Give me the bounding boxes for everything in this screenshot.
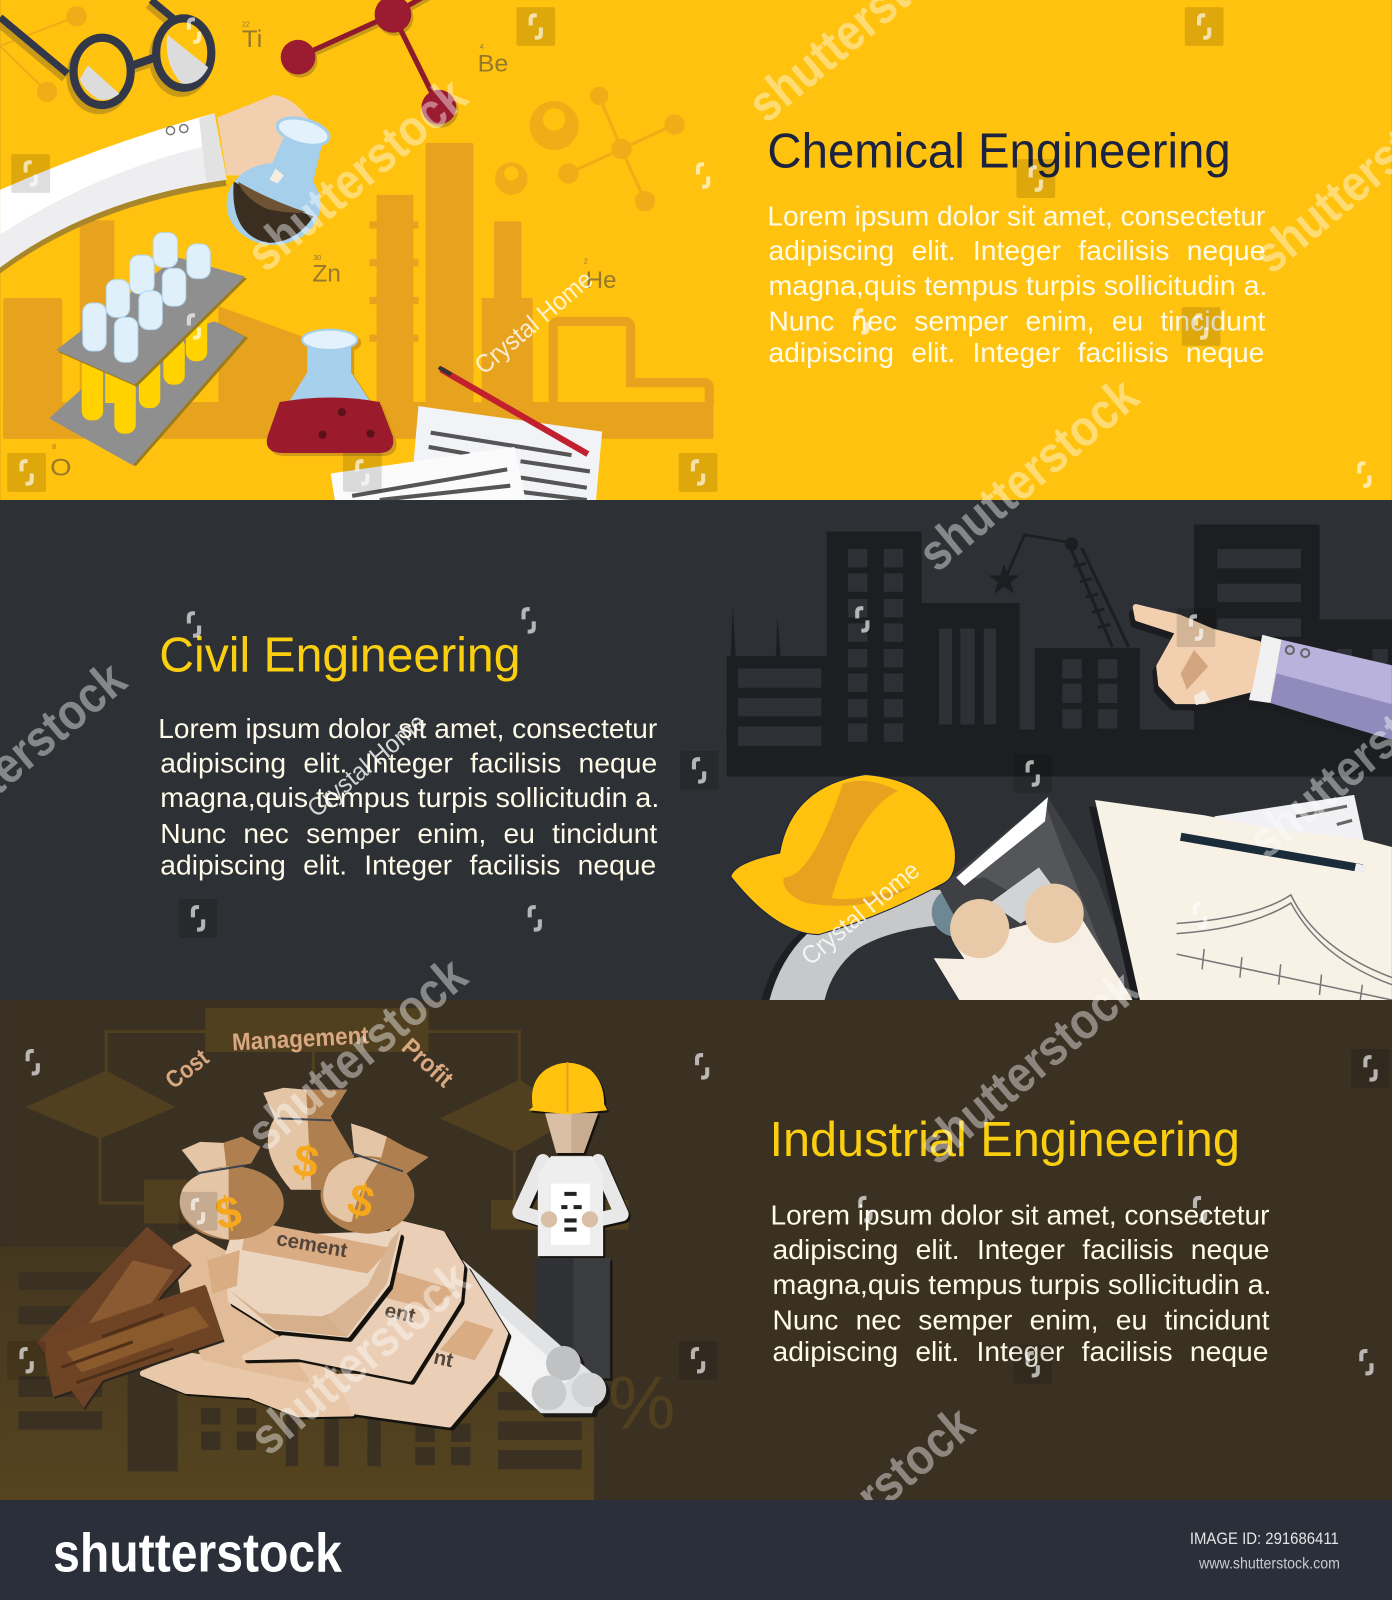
footer bar: [0, 1500, 1392, 1600]
panel: chemical engineering: [0, 0, 1392, 500]
shutterstock watermarks: shutterstock: [907, 959, 1149, 1175]
illustration: money bags: [180, 1088, 429, 1240]
factory silhouette background: [3, 143, 713, 439]
illustration: cement bags: nt: [432, 1347, 455, 1372]
book and rolled blueprints: [934, 797, 1143, 1000]
icon: red liquid flask: [267, 330, 393, 453]
flowchart and building background: %: [608, 1362, 675, 1446]
illustration: cement bags: [143, 1220, 505, 1424]
text block: chemical engineering: adipiscing elit. Integer facilisis neque: [768, 235, 1265, 266]
heading: industrial engineering: Industrial Engineering: [769, 1113, 1240, 1167]
illustration: pipes: [458, 1256, 606, 1413]
papers and pencil: [331, 367, 602, 500]
text block: civil engineering: Nunc nec semper enim, eu tincidunt: [160, 818, 658, 849]
heading: chemical engineering: Chemical Engineering: [767, 124, 1231, 178]
footer website: www.shutterstock.com: [1198, 1555, 1340, 1572]
element symbols: Ti: [242, 26, 262, 53]
text block: industrial engineering: Nunc nec semper enim, eu tincidunt: [773, 1305, 1270, 1336]
element symbols: 2: [584, 257, 588, 265]
curved labels: cost, management, profit: Profit: [396, 1033, 458, 1093]
footer logo: shutterstock: [53, 1521, 342, 1583]
element symbols: 22: [242, 21, 250, 29]
icon: red molecule: [281, 0, 456, 124]
shutterstock watermarks: shutterstock: [236, 946, 478, 1161]
illustration: worker with clipboard: [519, 1062, 622, 1379]
element symbols: [50, 21, 616, 482]
illustration: pointing hand with sleeve: [1136, 607, 1392, 740]
text block: chemical engineering: magna,quis tempus turpis sollicitudin a.: [768, 270, 1267, 301]
element symbols: O: [50, 455, 72, 482]
text block: chemical engineering: [767, 201, 1267, 368]
text block: civil engineering: adipiscing elit. Integer facilisis neque: [160, 747, 657, 778]
curved labels: cost, management, profit: Management: [231, 1022, 369, 1056]
text block: chemical engineering: adipiscing elit. Integer facilisis neque: [768, 337, 1264, 368]
illustration: arm holding flask: [0, 95, 332, 267]
illustration: cement bags: ent: [383, 1300, 417, 1328]
element symbols: Be: [478, 50, 508, 77]
crystal home watermarks: [302, 266, 925, 971]
text block: industrial engineering: [770, 1199, 1272, 1367]
crystal home watermarks: Crystal Home: [470, 266, 599, 380]
curved labels: cost, management, profit: Cost: [161, 1044, 214, 1095]
text block: civil engineering: magna,quis tempus turpis sollicitudin a.: [160, 782, 659, 813]
city skyline silhouette: [727, 524, 1392, 777]
icon: crane: [989, 535, 1129, 647]
text block: civil engineering: Lorem ipsum dolor sit amet, consectetur: [158, 713, 657, 744]
protractor: [769, 882, 1057, 1000]
text block: chemical engineering: Lorem ipsum dolor sit amet, consectetur: [767, 201, 1265, 232]
crystal home watermarks: Crystal Home: [302, 708, 431, 823]
text block: civil engineering: adipiscing elit. Integer facilisis neque: [160, 849, 656, 880]
element symbols: 4: [480, 43, 484, 51]
flowchart and building background: [0, 1008, 675, 1500]
element symbols: 30: [313, 254, 321, 262]
element symbols: 8: [52, 443, 56, 451]
shutterstock watermarks: shutterstock: [236, 66, 478, 282]
background molecules: [0, 6, 685, 211]
illustration: money bags: $: [211, 1185, 246, 1240]
panel: industrial engineering: [0, 1000, 1392, 1500]
icon: yellow hard hat: [731, 774, 955, 935]
text block: industrial engineering: adipiscing elit. Integer facilisis neque: [773, 1234, 1269, 1265]
footer image id: IMAGE ID: 291686411: [1190, 1530, 1339, 1548]
curved labels: cost, management, profit: [161, 1022, 458, 1095]
text block: civil engineering: [158, 713, 659, 880]
blueprint paper with pen: [1095, 795, 1392, 1000]
text block: industrial engineering: adipiscing elit. Integer facilisis neque: [773, 1336, 1268, 1367]
icon: glasses: [0, 0, 211, 105]
shutterstock watermarks: shutterstock: [907, 366, 1149, 582]
element symbols: Zn: [312, 261, 341, 288]
illustration: wood planks: [37, 1227, 224, 1408]
text block: industrial engineering: magna,quis tempus turpis sollicitudin a.: [773, 1269, 1272, 1300]
shutterstock watermarks: shutterstock: [239, 1250, 481, 1466]
text block: industrial engineering: Lorem ipsum dolor sit amet, consectetur: [770, 1199, 1269, 1230]
illustration: money bags: $: [342, 1173, 380, 1228]
panel: civil engineering: [0, 500, 1392, 1000]
heading: civil engineering: Civil Engineering: [159, 628, 520, 682]
element symbols: He: [586, 267, 616, 294]
illustration: cement bags: cement: [275, 1228, 349, 1262]
icon: test tube rack: [49, 233, 245, 465]
crystal home watermarks: Crystal Home: [796, 856, 925, 971]
text block: chemical engineering: Nunc nec semper enim, eu tincidunt: [768, 306, 1266, 337]
illustration: money bags: $: [289, 1134, 323, 1188]
